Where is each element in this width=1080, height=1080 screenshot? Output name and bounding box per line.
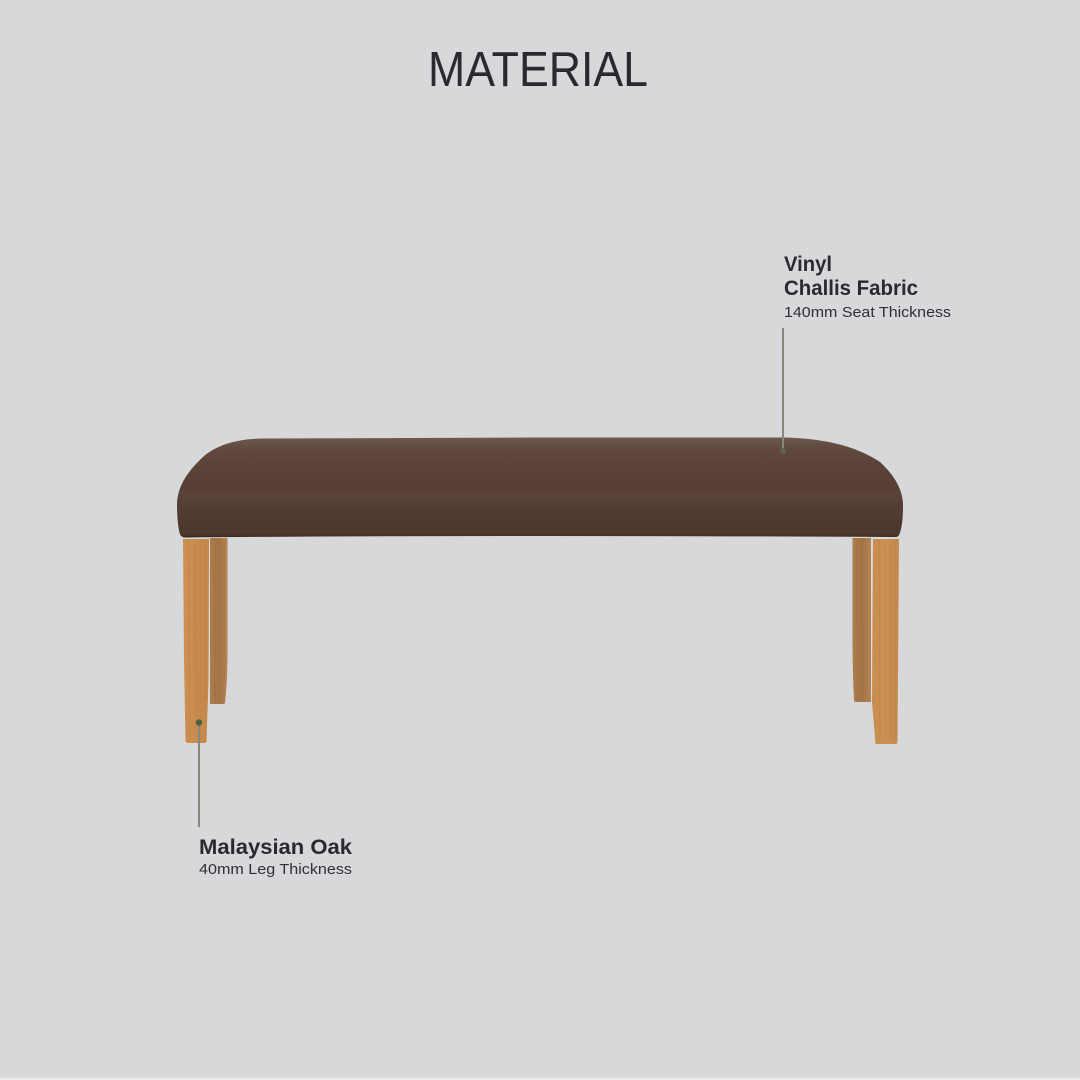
callout: seat pointer [780,328,786,454]
label: vinyl: Vinyl [784,253,832,276]
front right leg [872,539,899,744]
bench [177,438,903,744]
label: leg thickness: 40mm Leg Thickness [199,861,352,878]
back left leg [210,538,228,704]
callout: seat material text [784,253,951,321]
title: MATERIAL [428,43,648,97]
seat cushion [177,438,903,538]
callout: leg material text [199,836,352,878]
label: seat thickness: 140mm Seat Thickness [784,304,951,321]
front left leg [183,539,209,743]
back right leg [852,538,871,702]
label: malaysian oak: Malaysian Oak [199,836,352,859]
label: challis fabric: Challis Fabric [784,277,918,300]
callout: leg pointer [196,719,202,827]
